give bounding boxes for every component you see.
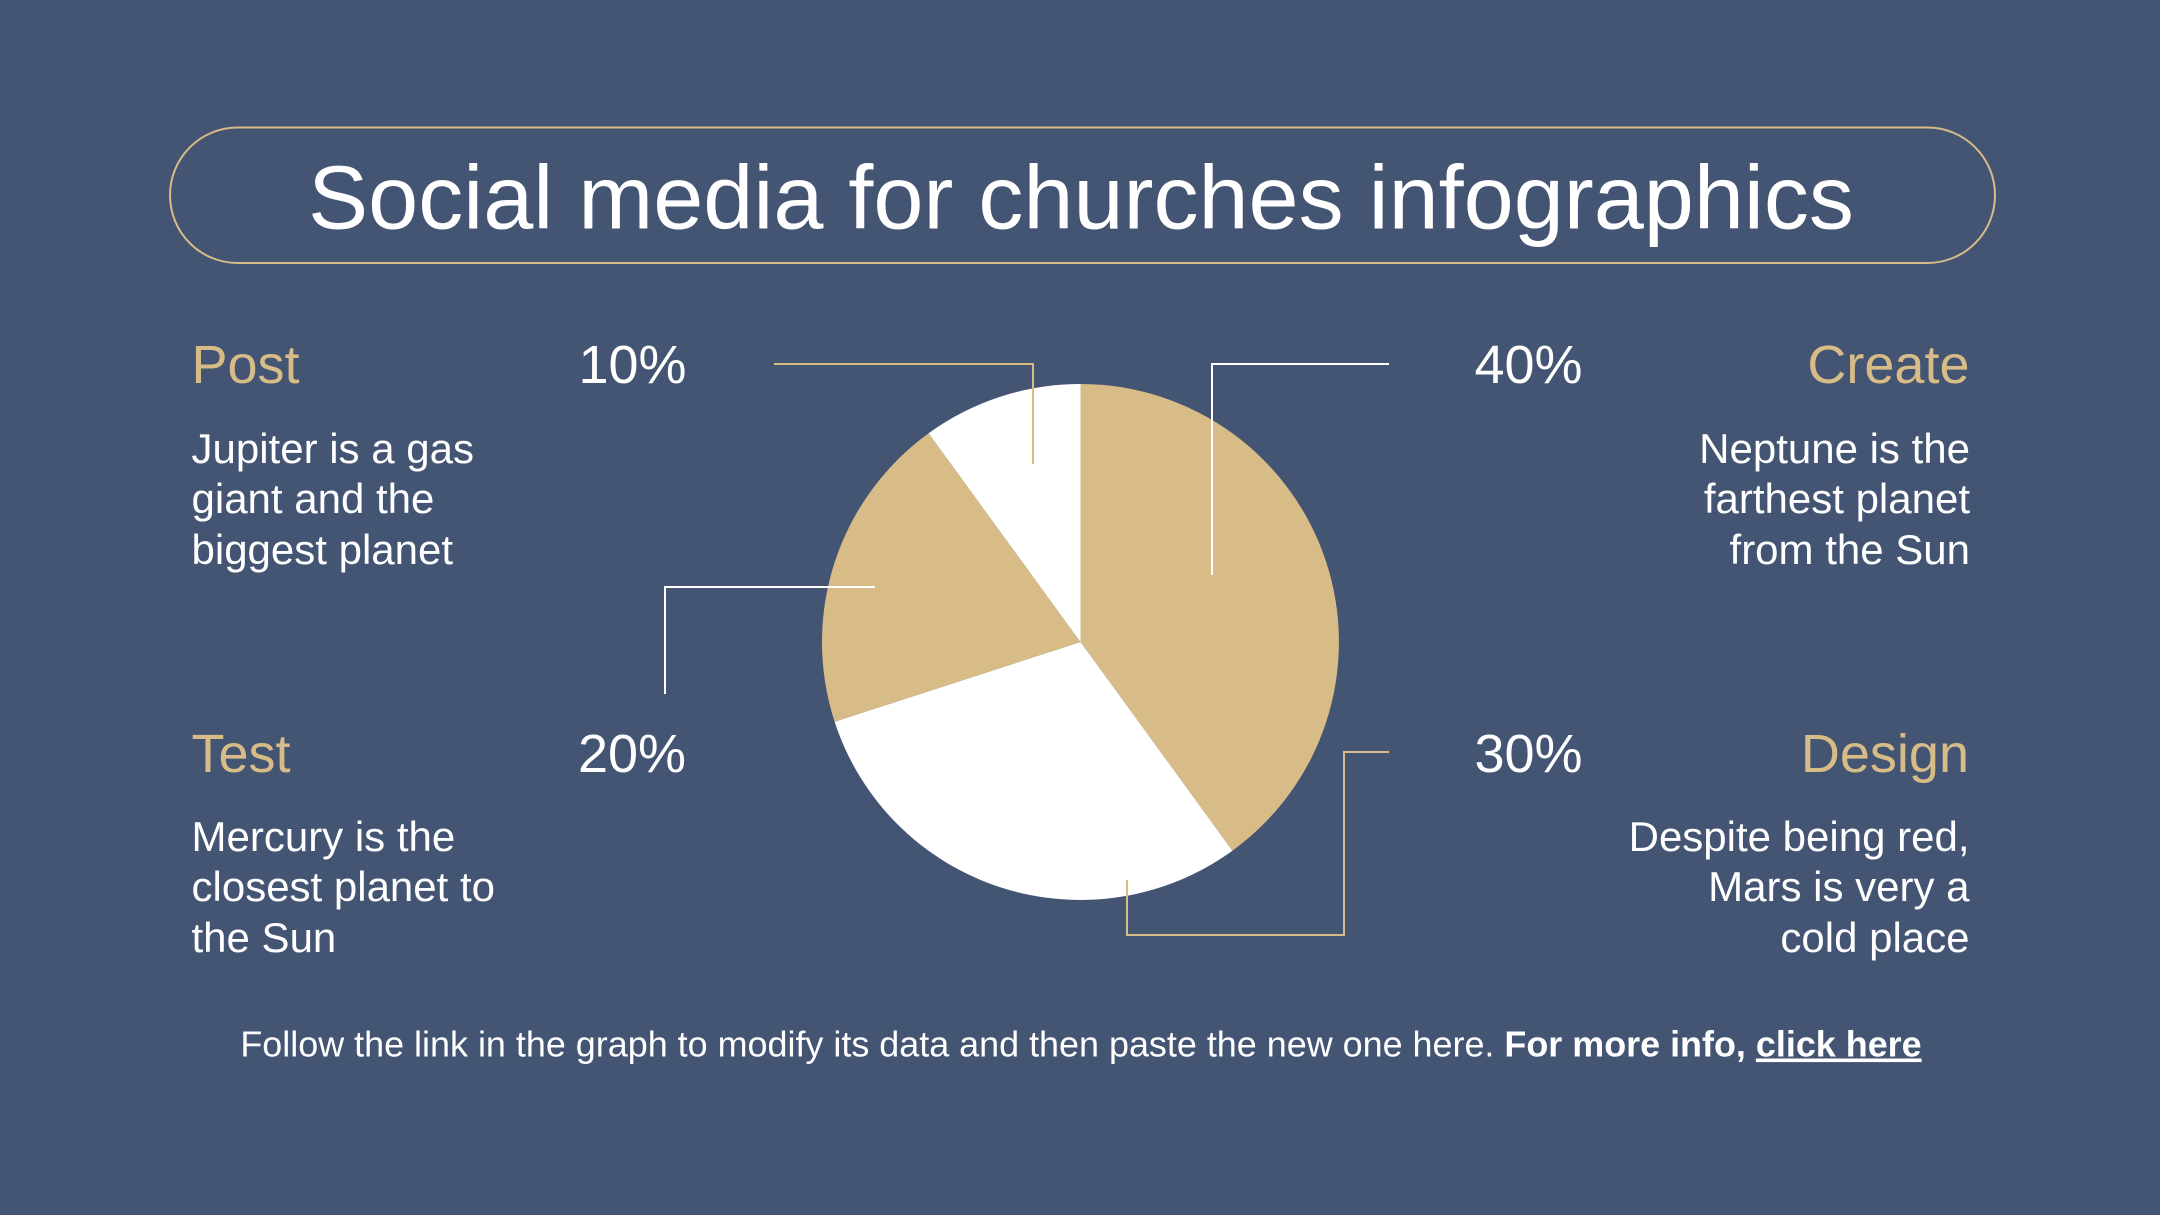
panel: Test: Mercury is the: [192, 813, 455, 860]
connector: Create 40%: [1212, 364, 1389, 575]
title: Social media for churches infographics: [308, 148, 1854, 248]
panel: Test: closest planet to: [192, 863, 495, 910]
panel: Test: [192, 724, 495, 961]
pie chart: [822, 384, 1339, 900]
panel: Design: cold place: [1780, 914, 1970, 961]
panel: Design: Despite being red,: [1629, 813, 1970, 860]
percentage: 40%: 40%: [1474, 335, 1583, 395]
connector: Design 30%: [1127, 752, 1389, 935]
connector: Test 20%: [665, 587, 875, 694]
panel: Post: [192, 335, 474, 573]
panel: Design: [1629, 724, 1970, 961]
footer note: Follow the link in the graph to modify its data and then paste the new one here. For more info, click here: [240, 1024, 1922, 1064]
percentage: 20%: 20%: [578, 724, 686, 784]
panel: Post: Jupiter is a gas: [192, 425, 474, 472]
panel: Create: Create: [1807, 335, 1970, 395]
panel: Create: [1699, 335, 1970, 573]
title: [170, 128, 1995, 263]
panel: Design: Mars is very a: [1708, 863, 1970, 910]
panel: Design: Design: [1801, 724, 1969, 784]
panel: Post: giant and the: [192, 475, 434, 522]
connector: Post 10%: [774, 364, 1033, 464]
panel: Create: from the Sun: [1730, 526, 1970, 573]
panel: Post: biggest planet: [192, 526, 453, 573]
percentage: 30%: 30%: [1474, 724, 1583, 784]
percentage: 10%: 10%: [578, 335, 687, 395]
panel: Test: Test: [192, 724, 291, 784]
panel: Create: farthest planet: [1704, 475, 1970, 522]
panel: Post: Post: [192, 335, 300, 395]
panel: Test: the Sun: [192, 914, 336, 961]
panel: Create: Neptune is the: [1699, 425, 1970, 472]
